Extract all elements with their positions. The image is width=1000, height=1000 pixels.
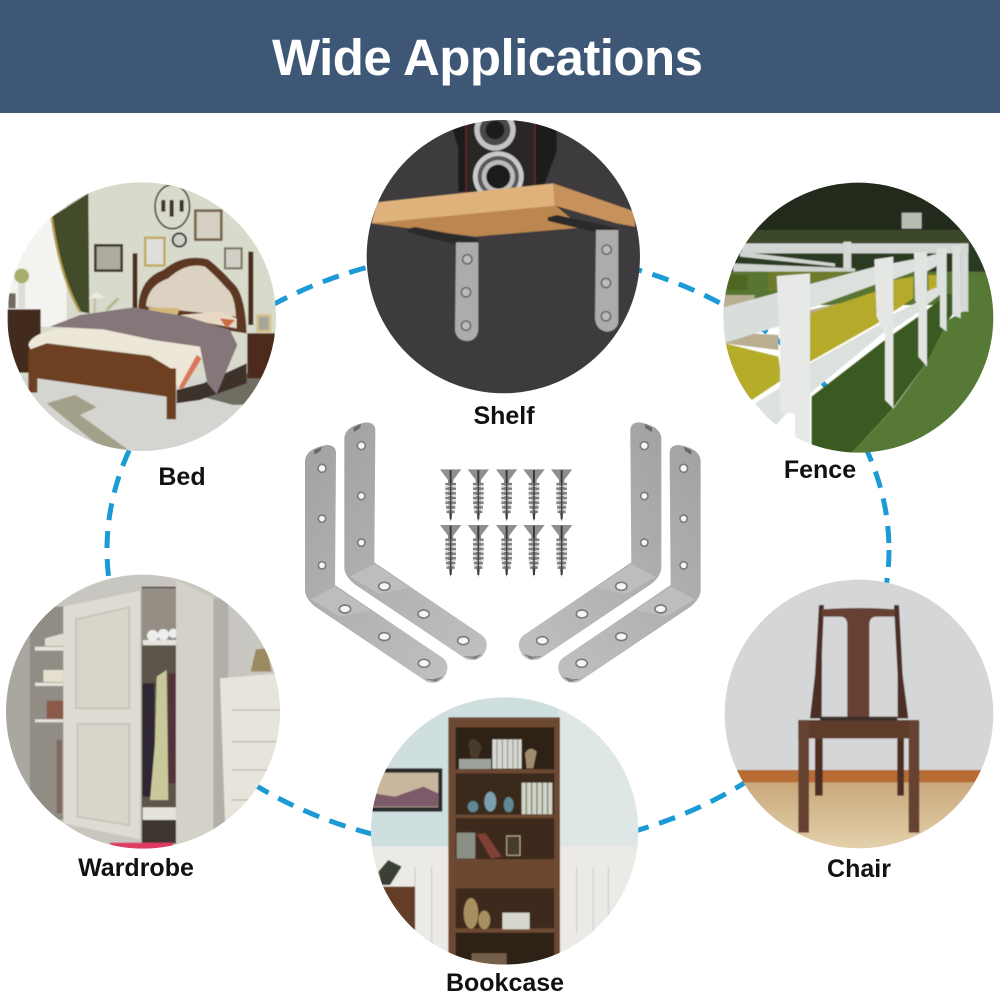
label: Chair: Chair <box>827 855 891 883</box>
header banner <box>0 0 1000 113</box>
center product: brackets and screws <box>305 422 701 683</box>
label: Shelf: Shelf <box>473 402 535 430</box>
bracket: outer left <box>305 445 447 683</box>
bracket: inner left <box>344 422 487 660</box>
bracket: outer right <box>558 445 701 683</box>
photo: shelf <box>366 120 640 394</box>
photo: bookcase <box>365 690 645 970</box>
bracket: inner right <box>519 422 661 660</box>
photo: bed <box>7 182 276 451</box>
photo: chair <box>720 575 1000 856</box>
label: Wardrobe: Wardrobe <box>78 854 194 882</box>
photo: fence <box>715 180 1000 457</box>
label: Fence: Fence <box>784 456 856 484</box>
title: Wide Applications <box>272 29 703 86</box>
screws <box>440 469 572 577</box>
label: Bed: Bed <box>158 463 206 491</box>
dashed connector ring <box>107 250 889 850</box>
photo: wardrobe <box>6 574 280 849</box>
label: Bookcase: Bookcase <box>446 969 564 997</box>
